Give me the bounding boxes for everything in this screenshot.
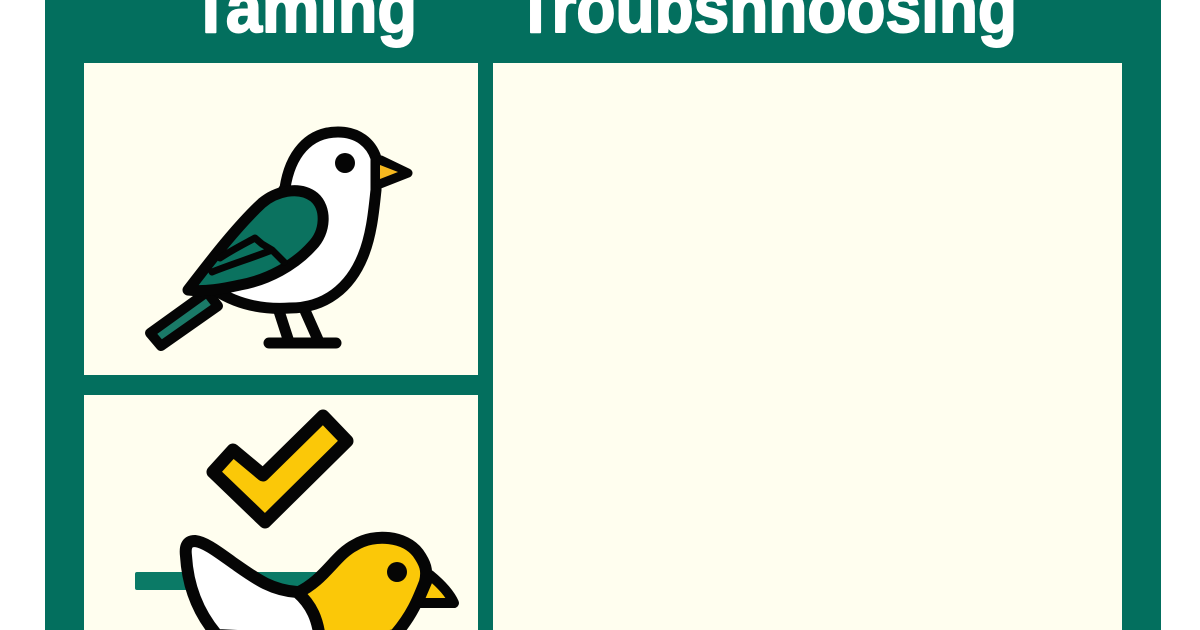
yellow bird beak (418, 575, 454, 603)
yellow bird wing (186, 541, 320, 630)
wing feathers (212, 238, 284, 272)
icon: perched bird (150, 132, 408, 346)
yellow bird body (297, 538, 426, 630)
panel: bottom left (84, 395, 478, 630)
icon: check mark (213, 416, 347, 522)
bird beak fill (380, 165, 398, 179)
bird beak outline (380, 160, 408, 184)
bird wing (188, 191, 323, 291)
panel: top left (84, 63, 478, 375)
bird eye (335, 153, 355, 173)
green bar (135, 572, 325, 590)
yellow bird eye (387, 562, 407, 582)
panel: right empty (493, 63, 1122, 630)
bird body (215, 132, 376, 308)
icon: yellow bird (186, 538, 454, 630)
bird legs (269, 306, 336, 343)
bird tail (150, 292, 218, 346)
